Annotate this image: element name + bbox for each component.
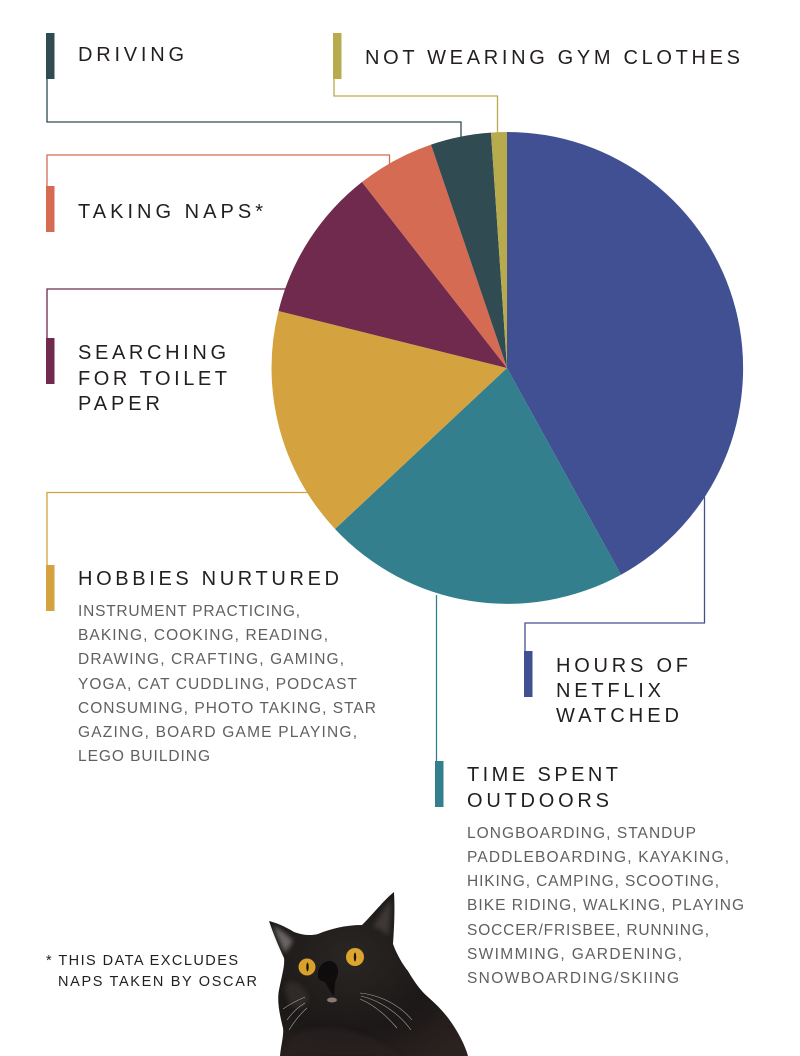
- cat left eye: [298, 958, 316, 976]
- cat right eye: [346, 948, 364, 966]
- callout: hobbies nurtured: [46, 492, 376, 765]
- footnote: NAPS TAKEN BY OSCAR: [58, 974, 257, 990]
- hobbies list: BAKING, COOKING, READING,: [78, 627, 328, 644]
- callout: taking naps: [46, 155, 390, 232]
- icon: black cat oscar: [269, 892, 468, 1056]
- outdoors list: BIKE RIDING, WALKING, PLAYING: [467, 897, 744, 914]
- callout: time spent outdoors: OUTDOORS: [467, 790, 609, 812]
- slice: driving: [431, 133, 507, 368]
- callout: searching for toilet paper: [46, 289, 287, 415]
- callout: not wearing gym clothes: NOT WEARING GYM CLOTHES: [365, 47, 740, 69]
- cat face light fur: [284, 982, 308, 1008]
- hobbies list: CONSUMING, PHOTO TAKING, STAR: [78, 700, 376, 717]
- outdoors list: LONGBOARDING, STANDUP: [467, 825, 696, 842]
- footnote: [46, 953, 257, 990]
- slice: not wearing gym clothes: [491, 132, 507, 368]
- callout: taking naps: TAKING NAPS*: [78, 201, 263, 223]
- hobbies list: GAZING, BOARD GAME PLAYING,: [78, 724, 357, 741]
- pie chart: [272, 132, 743, 604]
- hobbies list: INSTRUMENT PRACTICING,: [78, 603, 300, 620]
- cat nose: [318, 961, 338, 996]
- footnote: * THIS DATA EXCLUDES: [46, 953, 238, 969]
- slice: time spent outdoors: [335, 368, 621, 604]
- cat ears inner fur: [273, 925, 293, 953]
- cat mouth: [327, 998, 337, 1002]
- slice: hobbies nurtured: [272, 311, 507, 529]
- outdoors list: SOCCER/FRISBEE, RUNNING,: [467, 922, 709, 939]
- callout: hours of netflix watched: NETFLIX: [556, 680, 661, 702]
- slice: hours of netflix watched: [507, 132, 743, 575]
- callout: hours of netflix watched: [524, 497, 704, 727]
- callout: searching for toilet paper: PAPER: [78, 393, 160, 415]
- callout: hours of netflix watched: WATCHED: [556, 705, 679, 727]
- outdoors list: [467, 825, 744, 987]
- hobbies list: DRAWING, CRAFTING, GAMING,: [78, 651, 344, 668]
- cat whiskers: [283, 993, 412, 1030]
- outdoors list: HIKING, CAMPING, SCOOTING,: [467, 873, 719, 890]
- slice: searching for toilet paper: [278, 182, 507, 368]
- callout: driving: [46, 33, 461, 146]
- hobbies list: YOGA, CAT CUDDLING, PODCAST: [78, 676, 358, 693]
- cat chest warm fur: [284, 1028, 400, 1056]
- hobbies list: LEGO BUILDING: [78, 748, 210, 765]
- callout: not wearing gym clothes: [333, 33, 740, 133]
- outdoors list: SWIMMING, GARDENING,: [467, 946, 682, 963]
- hobbies list: [78, 603, 376, 765]
- callout: searching for toilet paper: SEARCHING: [78, 342, 226, 364]
- callout: searching for toilet paper: FOR TOILET: [78, 368, 227, 390]
- callout: time spent outdoors: [435, 595, 744, 987]
- callout: hours of netflix watched: HOURS OF: [556, 655, 688, 677]
- callout: time spent outdoors: TIME SPENT: [467, 764, 618, 786]
- outdoors list: PADDLEBOARDING, KAYAKING,: [467, 849, 729, 866]
- outdoors list: SNOWBOARDING/SKIING: [467, 970, 679, 987]
- callout: hobbies nurtured: HOBBIES NURTURED: [78, 568, 339, 590]
- callout: driving: DRIVING: [78, 44, 184, 66]
- slice: taking naps: [362, 145, 507, 368]
